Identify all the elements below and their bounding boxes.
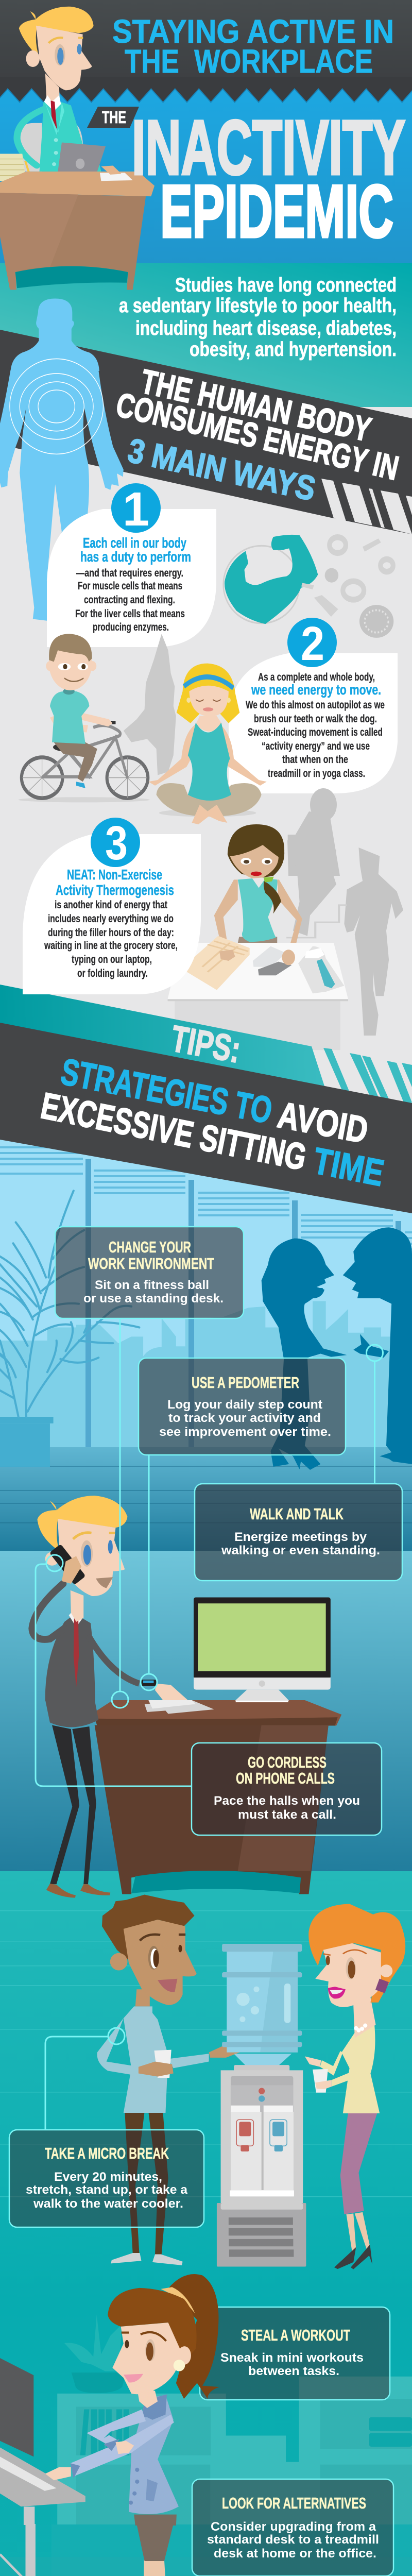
way 2 text [246, 671, 385, 779]
heading: Tips: TIPS: [168, 1018, 244, 1071]
illustration: desk with monitor [95, 1598, 341, 1894]
icon: yoga silhouette [124, 634, 176, 775]
monitor [194, 1598, 331, 1701]
callout: steal a workout: Sneak in mini workouts [220, 2351, 364, 2365]
way 1 heading: Each cell in our body [83, 535, 186, 551]
callout boxes [9, 1227, 402, 2576]
way 1 text: producing enzymes. [93, 621, 169, 633]
way 1 text: —and that requires energy. [76, 567, 183, 579]
callout: change your work environment: or use a standing desk. [83, 1292, 224, 1306]
way 3 text: Activity Thermogenesis [56, 882, 174, 898]
figure: meditating woman [148, 664, 267, 824]
number badge 1 [111, 482, 161, 536]
window frames [85, 1159, 401, 1448]
figure: woman at treadmill desk [0, 2274, 250, 2576]
silhouette: man [343, 1227, 412, 1464]
illustration: talking silhouettes [262, 1227, 412, 1470]
callout: walk and talk: walking or even standing. [221, 1544, 380, 1557]
way 2 text: that when on the [282, 754, 348, 766]
dark tips banner [0, 1023, 412, 1213]
callout: take a micro break [9, 2130, 204, 2227]
callout: take a micro break: walk to the water cooler. [33, 2197, 183, 2211]
blue title panel [0, 88, 412, 263]
callout: change your work environment [55, 1227, 244, 1318]
heading: Tips [38, 1018, 387, 1194]
callout: look for alternatives: desk at home or the office. [214, 2547, 376, 2561]
way 3 text: includes nearly everything we do [48, 913, 174, 925]
callout: go cordless [192, 1743, 382, 1835]
figure: woman folding laundry [168, 824, 348, 1050]
zigzag shadow [0, 77, 412, 103]
callout: look for alternatives: Consider upgrading from a [211, 2520, 376, 2534]
intro text [119, 274, 397, 361]
heading: Tips: AVOID [274, 1094, 371, 1151]
way 1 text: For muscle cells that means [78, 580, 182, 592]
heading: Tips: TIME [310, 1140, 387, 1194]
heading: Staying Active in the Workplace [112, 13, 394, 80]
lower wall tint [52, 2524, 412, 2576]
callout: walk and talk [195, 1484, 402, 1581]
gray energy panel background [0, 407, 412, 1139]
title: The Inactivity Epidemic: THE [102, 108, 126, 127]
silhouette: woman [262, 1239, 347, 1470]
window blinds [0, 1146, 412, 1250]
way 3 text: or folding laundry. [77, 968, 148, 979]
city skyline [0, 1301, 412, 1451]
callout: change your work environment: Sit on a fitness ball [95, 1278, 209, 1292]
callout: look for alternatives: standard desk to a treadmill [207, 2533, 379, 2547]
illustration: potted plant [0, 1191, 139, 1467]
callout: steal a workout: between tasks. [248, 2364, 339, 2378]
way 1 heading [80, 535, 191, 565]
way 2 text: “activity energy” and we use [262, 740, 370, 752]
callout: steal a workout: STEAL A WORKOUT [241, 2326, 350, 2344]
callout: go cordless: Pace the halls when you [214, 1794, 360, 1808]
way 2 text: treadmill or in yoga class. [268, 768, 365, 779]
heading: Tips: STRATEGIES TO [58, 1051, 276, 1131]
callout: go cordless: ON PHONE CALLS [236, 1769, 335, 1787]
callout: look for alternatives [192, 2479, 393, 2576]
number badge 2: 2 [301, 617, 324, 670]
icon: flexed muscle and cells [224, 535, 393, 638]
connector lines [27, 1318, 383, 2576]
callout: use a pedometer: USE A PEDOMETER [192, 1374, 299, 1392]
office window background [0, 1128, 412, 1448]
banner end stripes [321, 479, 412, 534]
callout: walk and talk: WALK AND TALK [250, 1505, 344, 1523]
callout: use a pedometer: to track your activity and [168, 1411, 321, 1425]
callout: use a pedometer: see improvement over time. [159, 1425, 331, 1439]
panel: way 1 [47, 482, 216, 647]
way 3 text: typing on our laptop, [72, 954, 152, 965]
icon: background silhouettes [287, 788, 403, 1036]
teal intro panel [0, 263, 412, 428]
number badge 1: 1 [123, 482, 149, 536]
treadmill [0, 2524, 250, 2576]
title: The Inactivity Epidemic [87, 104, 405, 253]
number badge 2 [287, 617, 337, 670]
dark diagonal banner [0, 330, 412, 534]
header background [0, 0, 412, 103]
number badge 3 [91, 816, 140, 870]
connector: cordless callout to phone [36, 1555, 192, 1786]
connector: pedometer callout to wrist [141, 1455, 157, 1690]
teal band end stripes [323, 1048, 412, 1105]
way 1 text: contracting and flexing. [84, 594, 175, 606]
way 3 text: waiting in line at the grocery store, [44, 940, 178, 952]
connector: walk and talk to silhouettes [367, 1345, 383, 1484]
heading: Tips: EXCESSIVE SITTING [38, 1085, 310, 1178]
way 1 heading: has a duty to perform [80, 549, 191, 565]
callout: change your work environment: WORK ENVIRONMENT [88, 1255, 214, 1273]
teal floor lines [0, 1910, 412, 2197]
background office furniture [57, 2315, 412, 2524]
callout: go cordless: GO CORDLESS [248, 1753, 327, 1771]
callout: change your work environment: CHANGE YOUR [109, 1238, 191, 1256]
icon: water cooler [217, 1944, 306, 2266]
zigzag header edge [0, 77, 412, 101]
callout: take a micro break: TAKE A MICRO BREAK [45, 2144, 169, 2162]
callout: go cordless: must take a call. [238, 1808, 336, 1822]
connector: micro break to cup man [45, 2028, 125, 2130]
callout: walk and talk: Energize meetings by [234, 1530, 367, 1544]
way 3 text: during the filler hours of the day: [48, 927, 174, 939]
way 3 text [44, 867, 178, 979]
callout: take a micro break: Every 20 minutes, [54, 2170, 162, 2184]
teal diagonal band [0, 985, 330, 1092]
panel: way 2 [229, 617, 398, 793]
figure: man on phone [32, 1496, 188, 1898]
callout: steal a workout [200, 2307, 390, 2400]
panel: way 3 [23, 816, 201, 994]
way 1 text [75, 567, 185, 633]
lower wall band [0, 2557, 412, 2576]
callout: use a pedometer: Log your daily step count [167, 1398, 322, 1412]
human body silhouette [0, 299, 124, 621]
connector: fitness ball callout to desk [112, 1318, 128, 1708]
floor bands [0, 1447, 412, 1551]
callout: take a micro break: stretch, stand up, or take a [26, 2183, 188, 2197]
way 1 text: For the liver cells that means [75, 608, 185, 620]
way 3 text: is another kind of energy that [55, 899, 167, 911]
illustration: man at desk [0, 7, 154, 290]
way 3 text: NEAT: Non-Exercise [67, 867, 162, 883]
number badge 3: 3 [105, 816, 128, 870]
callout: use a pedometer [139, 1358, 346, 1455]
heading: The human body consumes energy in 3 main ways: 3 MAIN WAYS [125, 431, 319, 508]
figure: man at water cooler [97, 1895, 241, 2265]
figure: woman with red hair [305, 1904, 405, 2269]
figure: boy on bicycle [19, 634, 150, 802]
